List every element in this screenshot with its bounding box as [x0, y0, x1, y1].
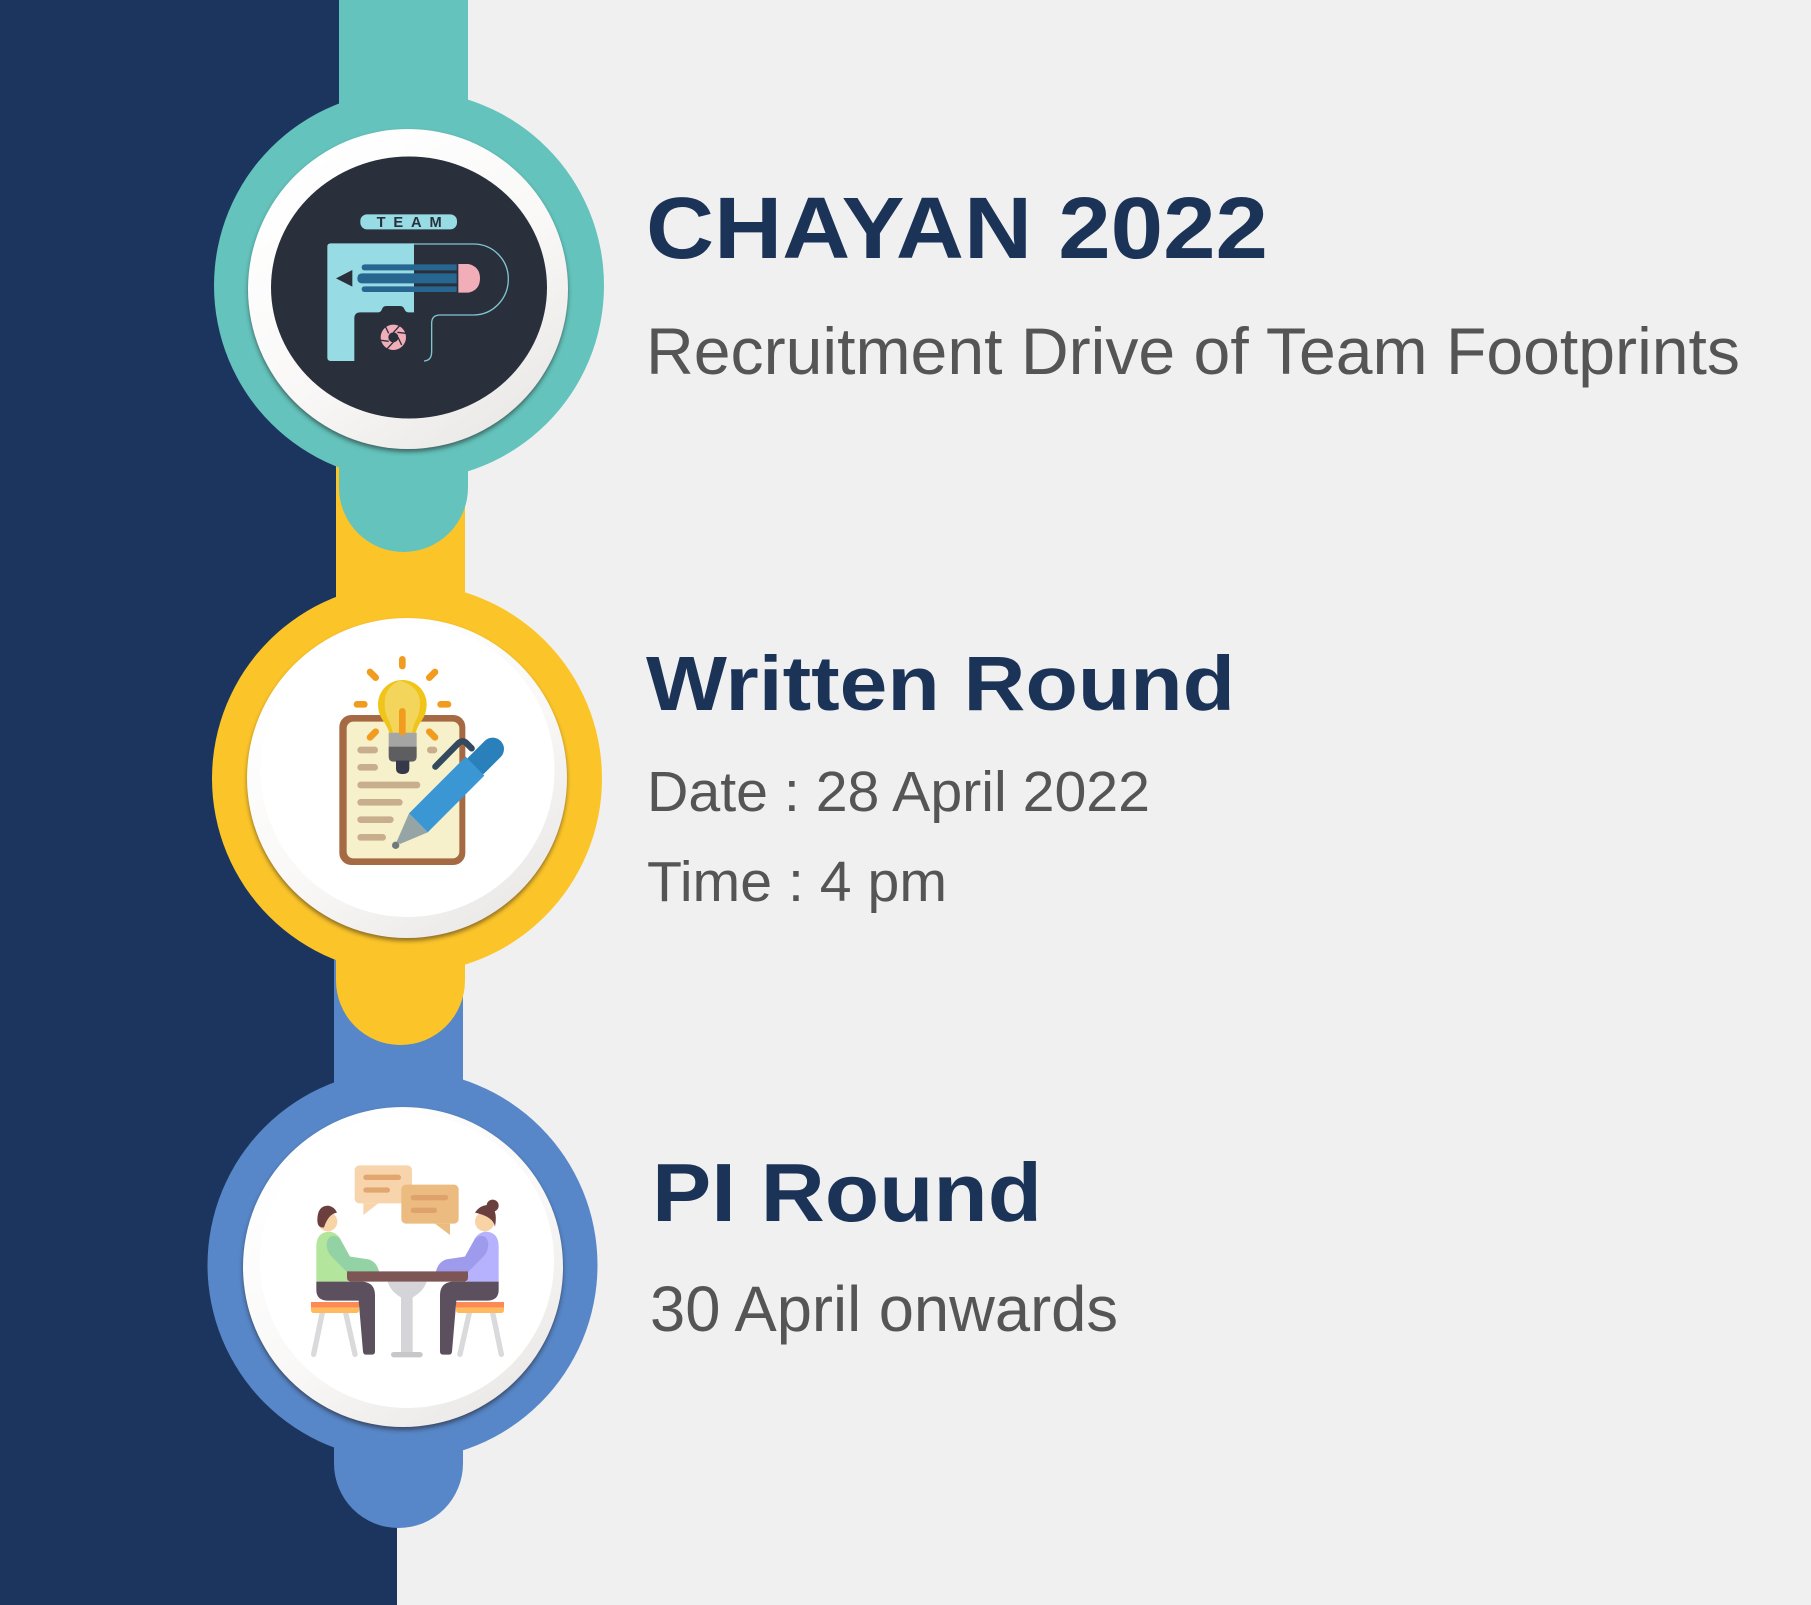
pencil — [336, 264, 480, 293]
heading: Written Round: Written Round — [646, 641, 1235, 727]
icon: Team Footprints logo — [327, 214, 508, 361]
text: 30 April onwards: 30 April onwards — [650, 1273, 1118, 1345]
heading: PI Round: PI Round — [652, 1146, 1042, 1239]
text: date: Date : 28 April 2022 — [647, 760, 1150, 824]
panel: step 1 CHAYAN 2022 — [214, 0, 1740, 552]
teal timeline marker — [214, 0, 604, 552]
light bulb — [378, 680, 427, 774]
heading: CHAYAN 2022: CHAYAN 2022 — [646, 180, 1268, 277]
text: time: Time : 4 pm — [647, 850, 947, 914]
camera aperture — [381, 325, 406, 350]
left navy panel — [0, 0, 397, 1605]
speech bubble right — [401, 1185, 459, 1235]
woman seated — [436, 1200, 504, 1355]
TEAM pill label — [360, 214, 457, 231]
blue timeline marker — [208, 930, 598, 1528]
icon: two people talking at a table — [311, 1165, 504, 1357]
table top — [347, 1271, 468, 1282]
light rays — [357, 659, 448, 737]
panel: step 2 Written Round — [212, 440, 1235, 1045]
panel: step 3 PI Round — [208, 930, 1118, 1528]
letter F block with camera — [327, 243, 508, 361]
man seated — [311, 1206, 379, 1355]
clipboard — [339, 715, 465, 865]
table pedestal — [388, 1282, 427, 1357]
TEAM pill label: TEAM — [377, 215, 442, 231]
icon: clipboard with light bulb and pen — [339, 659, 493, 865]
yellow timeline marker — [212, 440, 602, 1045]
pen — [392, 741, 493, 849]
text: recruitment subtitle: Recruitment Drive of Team Footprints — [646, 314, 1740, 388]
speech bubble left — [355, 1165, 412, 1215]
